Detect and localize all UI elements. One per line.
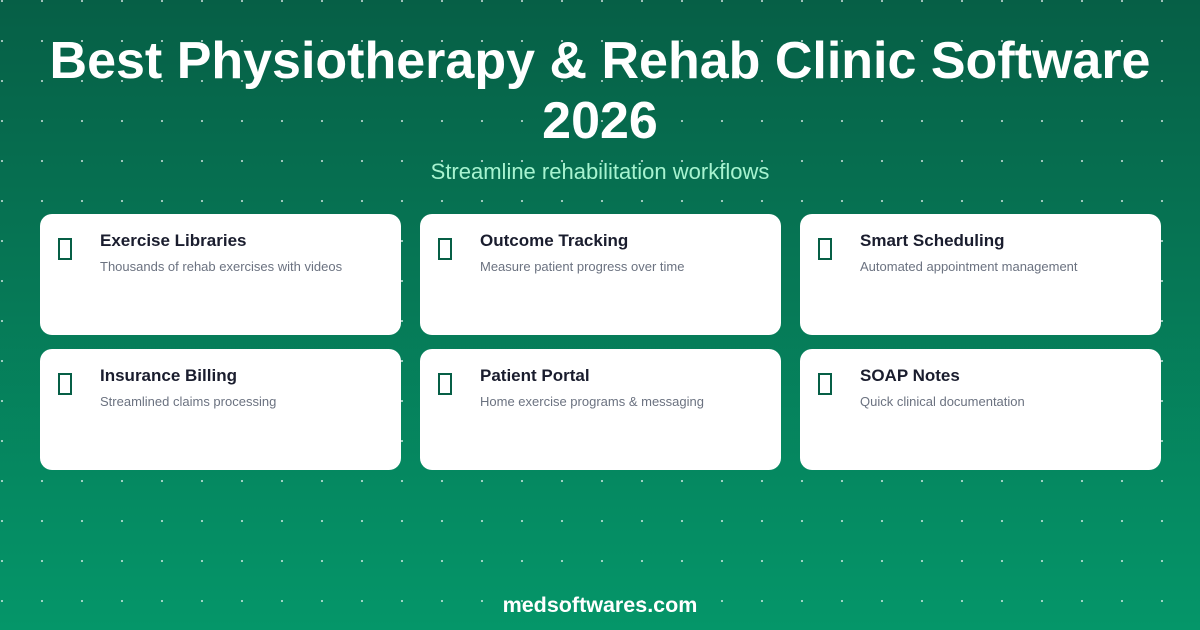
icon [818,238,832,260]
card: outcome tracking [420,214,781,335]
card: insurance billing [40,349,401,470]
icon [438,238,452,260]
description: Quick clinical documentation [860,394,1025,409]
footer: medsoftwares.com [503,593,697,617]
description: Home exercise programs & messaging [480,394,704,409]
heading: Outcome Tracking [480,231,628,250]
icon [58,238,72,260]
description: Thousands of rehab exercises with videos [100,259,342,274]
heading: Insurance Billing [100,366,237,385]
card: exercise libraries [40,214,401,335]
title: 2026 [542,92,658,150]
title [50,32,1150,150]
heading: Exercise Libraries [100,231,246,250]
icon [438,373,452,395]
description: Streamlined claims processing [100,394,276,409]
card: patient portal [420,349,781,470]
subtitle: Streamline rehabilitation workflows [431,159,769,184]
icon [818,373,832,395]
icon [58,373,72,395]
card: soap notes [800,349,1161,470]
title: Best Physiotherapy & Rehab Clinic Software [50,32,1150,90]
heading: SOAP Notes [860,366,960,385]
description: Automated appointment management [860,259,1078,274]
heading: Smart Scheduling [860,231,1005,250]
card: smart scheduling [800,214,1161,335]
heading: Patient Portal [480,366,590,385]
description: Measure patient progress over time [480,259,684,274]
